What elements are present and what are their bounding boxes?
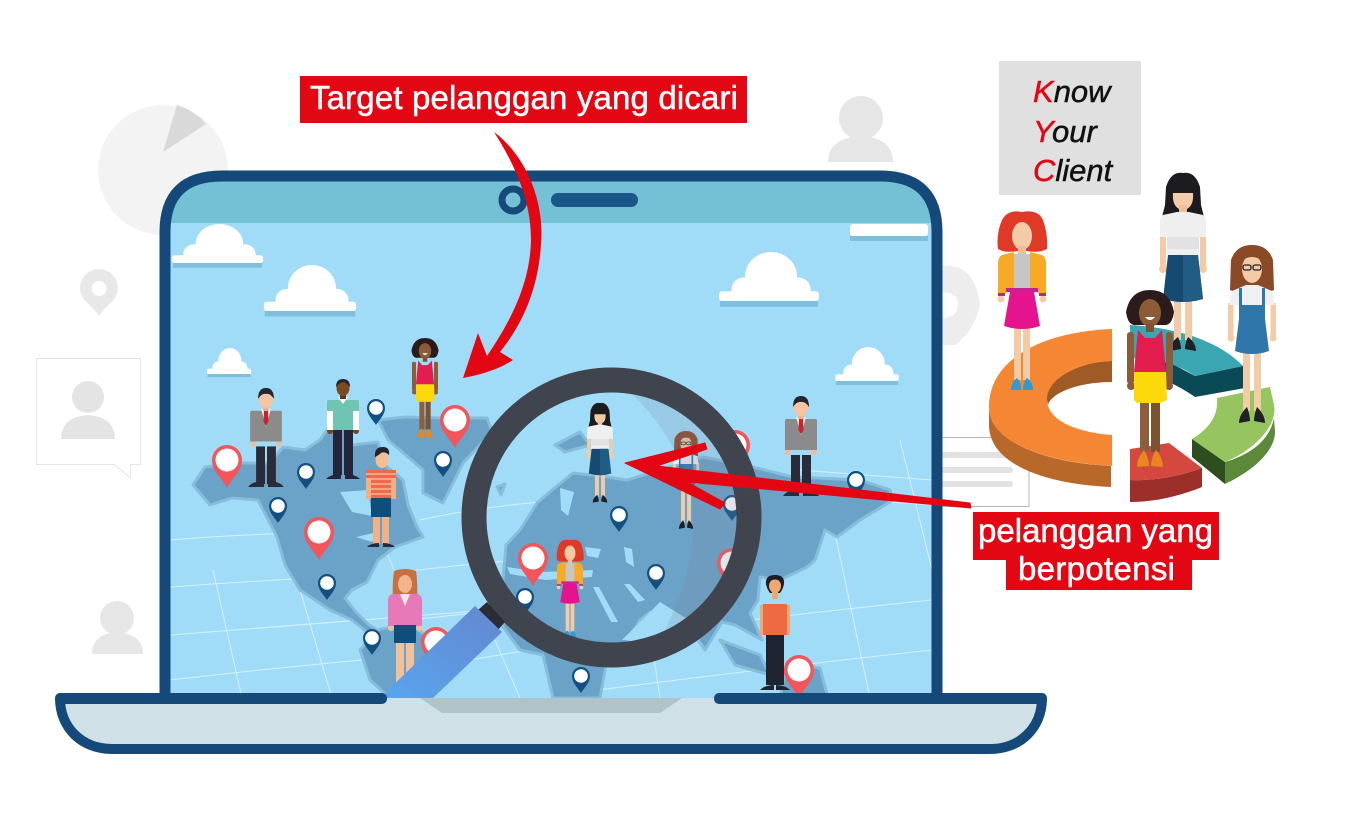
map: South America xyxy=(358,626,425,694)
speaker pill xyxy=(551,193,638,207)
magnifying glass xyxy=(380,380,749,698)
label: potential customers: berpotensi xyxy=(1018,550,1175,587)
lens ring xyxy=(474,380,749,655)
heading: target label: Target pelanggan yang dicari xyxy=(310,79,738,116)
KYC box: Know xyxy=(1033,74,1113,109)
KYC box: Client xyxy=(1033,153,1114,188)
background: document card xyxy=(930,438,1029,506)
label: potential customers xyxy=(973,512,1219,590)
person: woman with overalls xyxy=(1228,245,1276,423)
background: ghost pie chart xyxy=(98,105,228,235)
person: woman in red and yellow xyxy=(1126,290,1174,467)
map: islands xyxy=(497,432,828,698)
map: Greenland and Arctic xyxy=(378,417,492,503)
donut chart xyxy=(989,325,1275,502)
map pins xyxy=(212,399,865,698)
clouds xyxy=(172,224,928,385)
map grid and continents xyxy=(170,417,932,698)
handle neck xyxy=(478,602,505,631)
KYC box xyxy=(999,61,1141,195)
orange segment xyxy=(989,407,1111,487)
background: ghost person bottom left xyxy=(92,601,143,654)
label: potential customers: pelanggan yang xyxy=(978,512,1213,549)
laptop base xyxy=(55,693,1047,749)
teal segment xyxy=(1165,360,1245,397)
map: Eurasia and Africa xyxy=(503,457,893,698)
person: red hair woman xyxy=(998,211,1047,390)
map: inland seas and bays xyxy=(340,488,692,640)
screen header bar xyxy=(170,181,932,232)
handle xyxy=(380,606,502,698)
background: chat bubble with person xyxy=(36,358,140,478)
green segment xyxy=(1192,439,1225,484)
people on the map xyxy=(248,338,819,690)
KYC box: Your xyxy=(1033,114,1098,149)
laptop screen xyxy=(165,176,937,698)
map background xyxy=(170,181,932,698)
webcam xyxy=(502,189,524,211)
hinge notch xyxy=(420,698,682,713)
lens tint xyxy=(630,392,736,630)
map: North America xyxy=(193,425,423,636)
background: ghost map pin xyxy=(80,269,118,316)
arrow: to potential customers xyxy=(625,443,971,509)
background: ghost person top xyxy=(828,96,893,162)
laptop frame xyxy=(165,176,937,698)
background: ghost pin behind laptop xyxy=(940,266,980,345)
arrow: curved to target customers xyxy=(463,132,542,378)
red segment xyxy=(1130,468,1202,502)
person: black hair woman xyxy=(1159,173,1207,351)
